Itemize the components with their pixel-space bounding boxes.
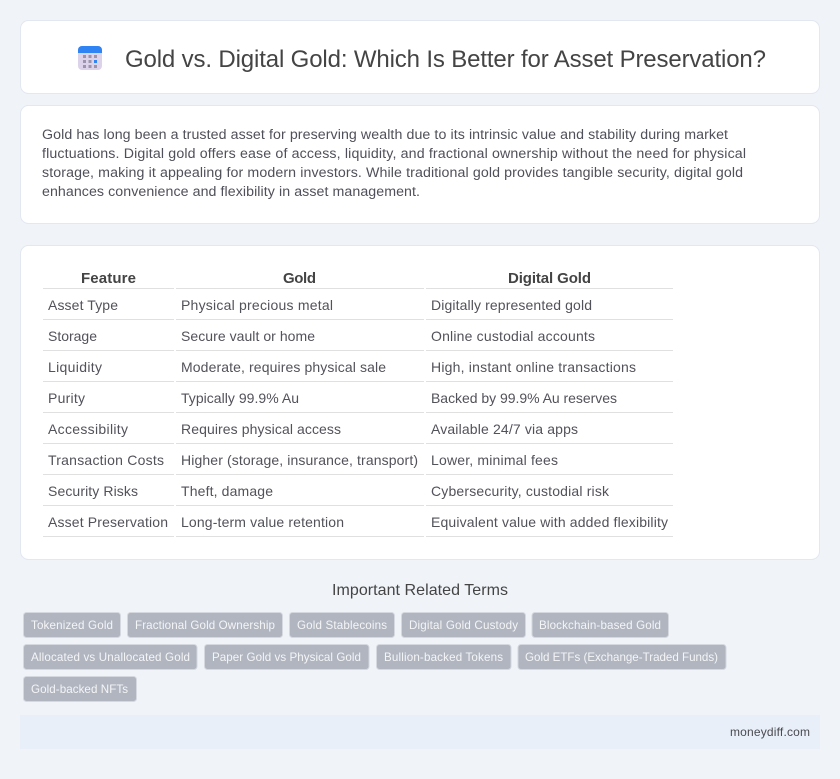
panel: introduction — [20, 106, 820, 224]
tag — [290, 612, 394, 638]
table header: Feature — [81, 270, 136, 287]
tag: Bullion-backed Tokens — [384, 651, 503, 664]
title: Gold vs. Digital Gold: Which Is Better for Asset Preservation? — [125, 46, 766, 73]
row: purity: Purity — [48, 390, 85, 406]
row: storage — [48, 328, 595, 344]
tag: Allocated vs Unallocated Gold — [31, 651, 190, 664]
row: accessibility: Requires physical access — [181, 421, 341, 437]
row: purity: Typically 99.9% Au — [181, 390, 299, 406]
text block: introduction paragraph: enhances convenience and flexibility in asset management. — [42, 184, 420, 200]
tag — [204, 644, 369, 670]
tag: Blockchain-based Gold — [539, 619, 661, 632]
tag: Gold Stablecoins — [297, 619, 387, 632]
text block: introduction paragraph: storage, making it appealing for modern investors. While traditional gold provides tangible security, digital gold — [42, 165, 743, 181]
tag — [24, 644, 197, 670]
row: asset type: Asset Type — [48, 297, 118, 313]
icon: calendar — [78, 46, 102, 70]
tags: related terms — [24, 612, 726, 702]
row: security risks: Theft, damage — [181, 483, 273, 499]
row: purity: Backed by 99.9% Au reserves — [431, 390, 617, 406]
row: liquidity: Liquidity — [48, 359, 102, 375]
table header — [81, 270, 591, 287]
row: liquidity: Moderate, requires physical sale — [181, 359, 386, 375]
tag — [24, 676, 136, 702]
row: asset preservation: Asset Preservation — [48, 514, 168, 530]
row: purity — [48, 390, 617, 406]
tag: Fractional Gold Ownership — [135, 619, 275, 632]
footer — [20, 715, 820, 749]
tag: Digital Gold Custody — [409, 619, 518, 632]
row: asset type: Digitally represented gold — [431, 297, 592, 313]
text block: introduction paragraph: fluctuations. Digital gold offers ease of access, liquidity, and fractional ownership without the need for physical — [42, 146, 746, 162]
panel: header — [20, 20, 820, 94]
tag: Gold ETFs (Exchange-Traded Funds) — [525, 651, 718, 664]
tag: Gold-backed NFTs — [31, 683, 128, 696]
footer: moneydiff.com — [730, 725, 810, 739]
table header: Gold — [283, 270, 316, 287]
row: accessibility: Accessibility — [48, 421, 128, 437]
table header: Digital Gold — [508, 270, 591, 287]
row: asset preservation — [48, 514, 668, 530]
panel: comparison table — [20, 246, 820, 560]
text block: introduction paragraph — [42, 127, 746, 200]
row: transaction costs: Lower, minimal fees — [431, 452, 558, 468]
row: liquidity: High, instant online transactions — [431, 359, 636, 375]
row: accessibility: Available 24/7 via apps — [431, 421, 578, 437]
tag — [376, 644, 511, 670]
tag — [532, 612, 668, 638]
row: accessibility — [48, 421, 578, 437]
row: security risks: Cybersecurity, custodial risk — [431, 483, 610, 499]
row: security risks — [48, 483, 610, 499]
row: security risks: Security Risks — [48, 483, 138, 499]
row: transaction costs: Higher (storage, insurance, transport) — [181, 452, 418, 468]
text block: introduction paragraph: Gold has long been a trusted asset for preserving wealth due to its intrinsic value and stability during market — [42, 127, 728, 143]
row: asset type — [48, 297, 592, 313]
row: asset preservation: Long-term value retention — [181, 514, 344, 530]
heading: related terms: Important Related Terms — [332, 582, 508, 599]
row: liquidity — [48, 359, 636, 375]
row: asset type: Physical precious metal — [181, 297, 333, 313]
tag: Paper Gold vs Physical Gold — [212, 651, 361, 664]
row: transaction costs: Transaction Costs — [48, 452, 164, 468]
tag — [402, 612, 526, 638]
row: storage: Secure vault or home — [181, 328, 315, 344]
tag — [24, 612, 120, 638]
tag: Tokenized Gold — [31, 619, 113, 632]
tag — [128, 612, 282, 638]
tag — [518, 644, 726, 670]
row: transaction costs — [48, 452, 558, 468]
row: storage: Storage — [48, 328, 97, 344]
row: asset preservation: Equivalent value with added flexibility — [431, 514, 668, 530]
row: storage: Online custodial accounts — [431, 328, 595, 344]
